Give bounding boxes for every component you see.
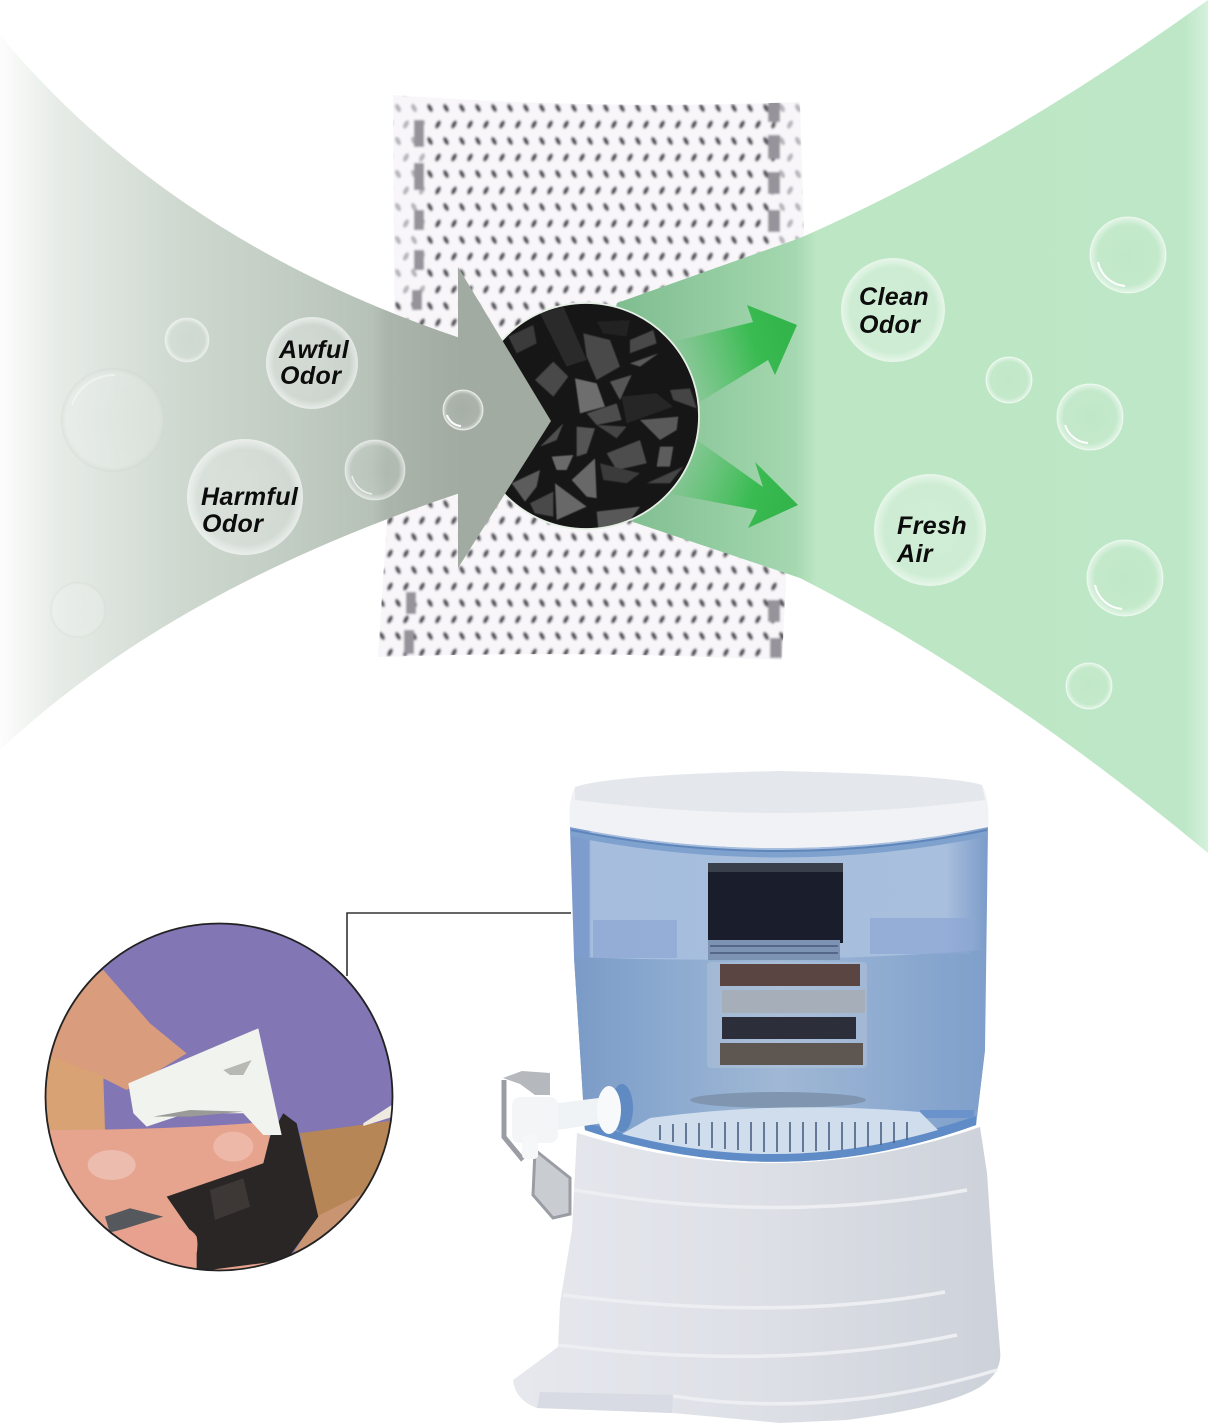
- bubble label: Clean Odor: [841, 258, 945, 362]
- green purified air funnel: [586, 0, 1208, 853]
- bubble faint left lower: [50, 582, 106, 638]
- green arrow upper: [660, 305, 797, 405]
- bubble right bottom: [1066, 663, 1112, 709]
- tap: [503, 1071, 633, 1218]
- connector line: [347, 913, 571, 976]
- grey odor funnel: [0, 35, 460, 750]
- bubble right middle: [1057, 384, 1123, 450]
- mesh charcoal bag: [370, 90, 810, 665]
- bubble label: Clean Odor: Clean: [859, 283, 929, 311]
- bubble faint left large: [61, 368, 165, 472]
- charcoal circle: [502, 302, 700, 530]
- bubble label: Awful Odor: [266, 317, 358, 409]
- filter stack: [707, 962, 867, 1068]
- grey inflow arrow head: [458, 267, 551, 568]
- bubble middle left: [345, 440, 405, 500]
- bubble label: Fresh Air: Air: [896, 540, 934, 568]
- green arrow lower: [650, 435, 798, 528]
- bubble right small: [986, 357, 1032, 403]
- black charcoal cartridge: [708, 863, 843, 960]
- bubble right lower: [1087, 540, 1163, 616]
- photo: hand inserting charcoal sachet: [43, 923, 397, 1273]
- bubble label: Fresh Air: [874, 474, 986, 586]
- bubble label: Harmful Odor: [187, 439, 303, 555]
- bubble in arrow: [443, 390, 483, 430]
- bubble small left: [165, 318, 209, 362]
- bubble right top: [1090, 217, 1166, 293]
- white grate with slots: [622, 1092, 938, 1154]
- bubble label: Harmful Odor: Harmful: [201, 483, 299, 511]
- purifier tank: [570, 827, 988, 1162]
- purifier base: [513, 1127, 1000, 1423]
- purifier lid: [570, 771, 988, 848]
- bubble label: Clean Odor: Odor: [859, 311, 921, 339]
- water purifier: [503, 771, 1000, 1423]
- bubble label: Fresh Air: Fresh: [897, 512, 967, 540]
- bubble label: Harmful Odor: Odor: [202, 510, 264, 538]
- bubble label: Awful Odor: Awful: [278, 336, 350, 364]
- bubble label: Awful Odor: Odor: [280, 362, 342, 390]
